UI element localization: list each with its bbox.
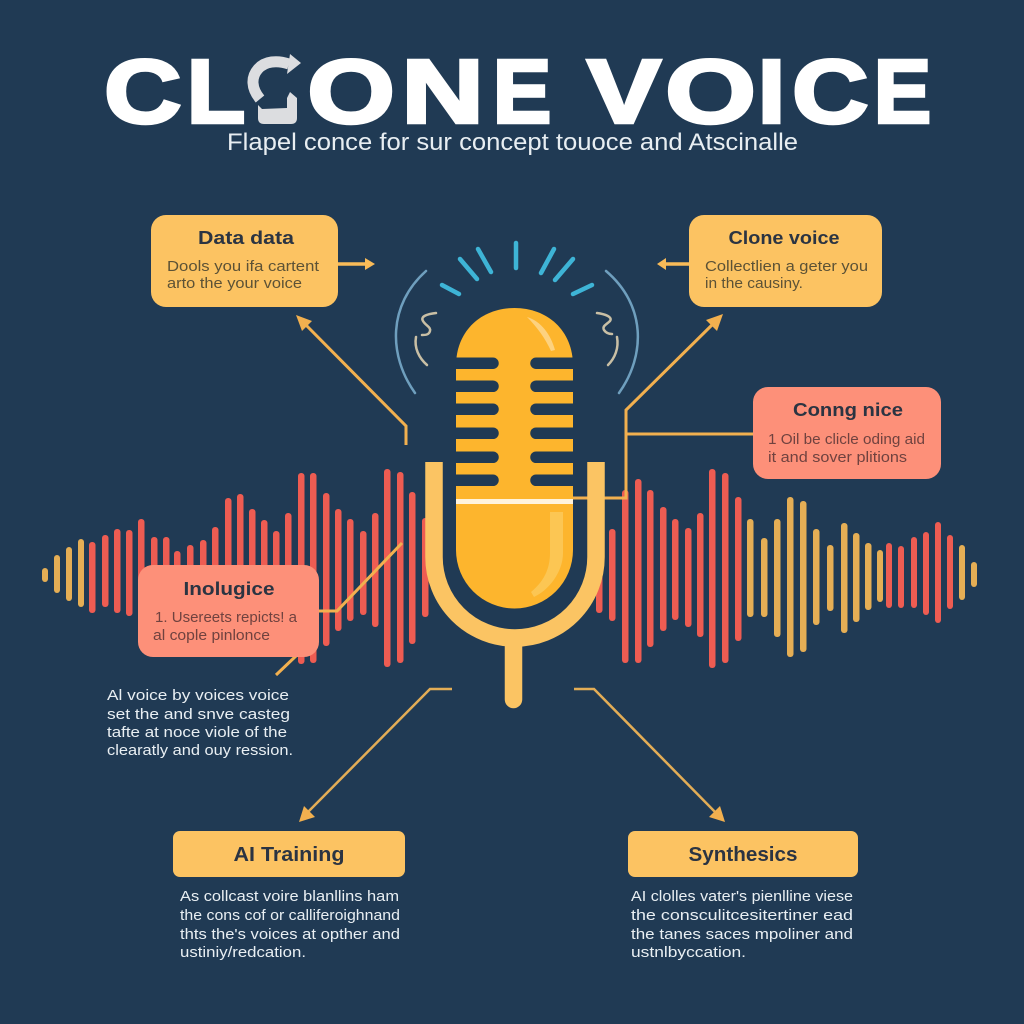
chart: audio waveform [42, 469, 977, 668]
text block: ai training: thts the's voices at opther and [180, 926, 400, 943]
grille slots [456, 358, 573, 486]
text block: synthesics: ustnlbyccation. [631, 944, 746, 961]
text block: left description: Al voice by voices voice [107, 687, 289, 704]
panel: clone voice [689, 215, 882, 307]
title [104, 40, 931, 142]
text block: ai training: As collcast voire blanllins ham [180, 888, 399, 905]
title: C [104, 41, 181, 141]
cradle [434, 462, 596, 638]
text block: 1. Usereets repicts! a [155, 610, 298, 626]
arrow: clone voice box left [657, 258, 689, 270]
text block: left description: clearatly and ouy ression. [107, 742, 293, 759]
heading: Data data [198, 227, 295, 248]
text block: it and sover plitions [768, 450, 907, 466]
title: N [402, 41, 484, 142]
text block: al cople pinlonce [153, 628, 270, 644]
text block: left description: set the and snve casteg [107, 706, 290, 723]
arrow: to synthesics [574, 689, 725, 822]
text block: ai training: ustiniy/redcation. [180, 944, 306, 961]
heading: Conng nice [793, 399, 903, 420]
text block [705, 259, 868, 292]
microphone [434, 308, 596, 700]
text block: Dools you ifa cartent [167, 259, 319, 275]
title: C [792, 40, 868, 142]
text block: left description: tafte at noce viole of the [107, 724, 287, 741]
text block [153, 610, 298, 644]
heading: Inolugice [184, 578, 274, 599]
icon: cloned head with arrow [253, 54, 301, 124]
icon: sound rays [442, 243, 592, 294]
title: O [665, 42, 756, 142]
title: E [874, 40, 931, 142]
text block: synthesics: AI clolles vater's pienlline viese [631, 888, 853, 905]
text block: ai training: the cons cof or calliferoighnand [180, 907, 400, 924]
panel: synthesics [628, 831, 858, 877]
text block: synthesics: the tanes saces mpoliner and [631, 926, 853, 943]
panel: inolugice [138, 565, 319, 657]
heading: AI Training [234, 844, 344, 866]
icon: sound arcs [396, 271, 638, 393]
text block [768, 432, 925, 466]
text block: 1 Oil be clicle oding aid [768, 432, 925, 448]
panel: data data [151, 215, 338, 307]
subtitle: Flapel conce for sur concept touoce and Atscinalle [227, 129, 798, 156]
arrow: to ai training [299, 689, 452, 822]
arrow: left callout connector [276, 543, 402, 675]
text block [167, 259, 319, 292]
heading: Synthesics [688, 844, 798, 866]
text block: synthesics [631, 888, 853, 961]
stand [505, 642, 522, 700]
heading: Clone voice [728, 227, 840, 248]
panel: conng nice [753, 387, 941, 479]
title: I [758, 41, 785, 141]
title: V [587, 42, 661, 142]
arrow: data box right [338, 258, 375, 270]
title: E [493, 41, 551, 142]
title: L [187, 41, 245, 142]
text block: synthesics: the consculitcesitertiner ead [631, 907, 853, 924]
text block: Collectlien a geter you [705, 259, 868, 275]
text block: left description [107, 687, 293, 759]
panel: ai training [173, 831, 405, 877]
band [456, 499, 573, 504]
title: O [308, 41, 395, 142]
text block: arto the your voice [167, 276, 302, 292]
arrow: to data box [296, 315, 406, 445]
mic head [456, 308, 573, 608]
highlights [527, 317, 555, 351]
arrow: to clone voice box [573, 314, 753, 498]
text block: in the causiny. [705, 276, 803, 292]
text block: ai training [180, 888, 400, 961]
